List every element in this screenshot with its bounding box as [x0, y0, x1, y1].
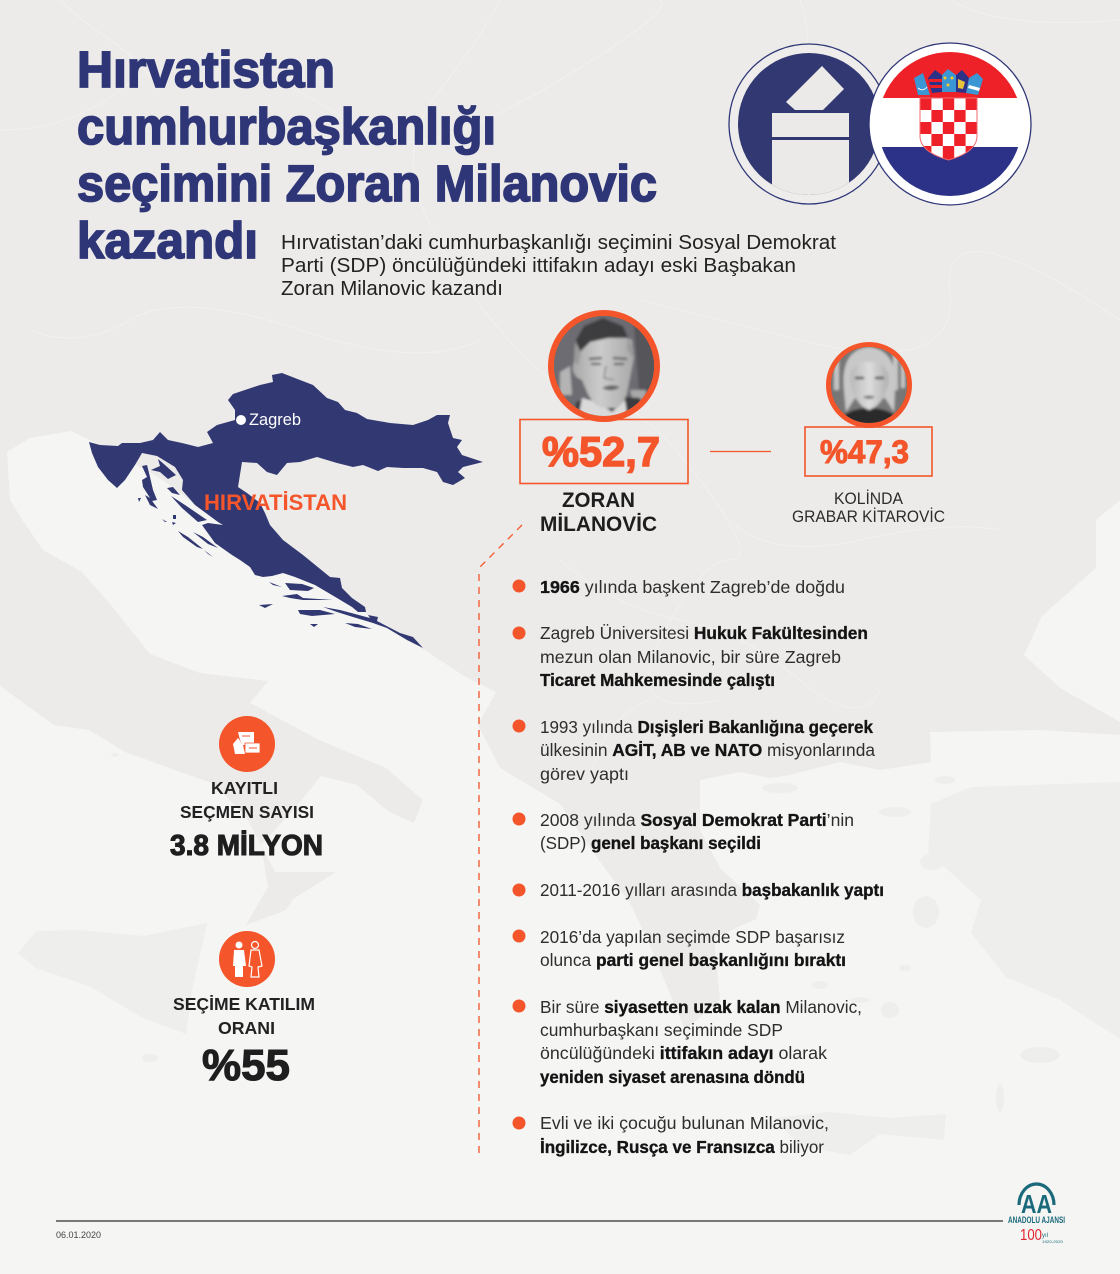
logo: Anadolu Ajansı: 100	[1020, 1227, 1042, 1244]
label: Hırvatistan: HIRVATİSTAN	[204, 490, 347, 515]
title: kazandı	[77, 212, 258, 269]
biography list	[512, 577, 884, 1157]
photo: Kolinda Grabar Kitarovic	[828, 344, 910, 426]
subtitle: Parti (SDP) öncülüğündeki ittifakın adayı eski Başbakan	[281, 255, 796, 277]
bullet 4: 2008 yılında Sosyal Demokrat Parti’nin	[540, 810, 854, 830]
subtitle	[281, 232, 836, 300]
stat: turnout	[173, 994, 315, 1090]
result: Milanovic: %52,7	[542, 428, 660, 475]
name: Kolinda Grabar Kitarovic: KOLİNDA	[834, 489, 904, 508]
bullet 7: öncülüğündeki ittifakın adayı olarak	[540, 1043, 827, 1063]
footer rule	[56, 1220, 1003, 1222]
title: Hırvatistan	[77, 41, 335, 98]
Turkey	[928, 782, 1120, 1039]
name: Zoran Milanovic: MİLANOVİC	[540, 513, 657, 536]
bullet 7: cumhurbaşkanı seçiminde SDP	[540, 1020, 783, 1040]
title: cumhurbaşkanlığı	[77, 98, 496, 155]
bullet 8	[512, 1113, 829, 1157]
stat: registered voters	[170, 778, 323, 862]
stat: registered voters: SEÇMEN SAYISI	[180, 802, 314, 822]
border lines	[0, 0, 1120, 780]
bullet 3: 1993 yılında Dışişleri Bakanlığına geçerek	[540, 717, 873, 737]
bullet 5: 2011-2016 yılları arasında başbakanlık yaptı	[540, 880, 884, 900]
date: 06.01.2020	[56, 1230, 101, 1240]
name: Kolinda Grabar Kitarovic	[792, 489, 945, 526]
bullet 4	[512, 810, 854, 853]
title	[77, 41, 657, 269]
logo: Anadolu Ajansı: yıl	[1042, 1233, 1048, 1239]
bullet 3: ülkesinin AGİT, AB ve NATO misyonlarında	[540, 740, 875, 760]
bullet 6	[512, 927, 846, 970]
islands	[138, 459, 423, 648]
bullet 2: mezun olan Milanovic, bir süre Zagreb	[540, 647, 841, 667]
bullet 8: Evli ve iki çocuğu bulunan Milanovic,	[540, 1113, 829, 1133]
bullet 6: olunca parti genel başkanlığını bıraktı	[540, 950, 846, 970]
Crete	[774, 1112, 946, 1155]
logo: Anadolu Ajansı: ANADOLU AJANSI	[1008, 1215, 1065, 1225]
name: Kolinda Grabar Kitarovic: GRABAR KİTAROVİC	[792, 507, 945, 526]
stat: turnout: ORANI	[218, 1018, 275, 1038]
bullet 7: yeniden siyaset arenasına döndü	[540, 1067, 805, 1087]
label: Zagreb: Zagreb	[249, 410, 301, 429]
bullet 3: görev yaptı	[540, 764, 629, 784]
map: Croatia	[89, 373, 483, 648]
Aegean islands	[111, 753, 1060, 1112]
icon: Croatian flag	[869, 43, 1031, 205]
result: Grabar Kitarovic	[805, 427, 932, 476]
bullet 2	[512, 623, 868, 690]
Sicily	[18, 923, 207, 1034]
bullet 6: 2016’da yapılan seçimde SDP başarısız	[540, 927, 845, 947]
name: Zoran Milanovic: ZORAN	[562, 489, 635, 512]
title: seçimini Zoran Milanovic	[77, 155, 657, 212]
bullet 8: İngilizce, Rusça ve Fransızca biliyor	[540, 1137, 824, 1157]
bullet 2: Ticaret Mahkemesinde çalıştı	[540, 670, 775, 690]
logo: Anadolu Ajansı: 1920-2020	[1042, 1239, 1064, 1244]
result: Milanovic	[520, 420, 688, 484]
subtitle: Zoran Milanovic kazandı	[281, 278, 503, 300]
bullet 7	[512, 997, 862, 1087]
icon: voters	[219, 931, 275, 987]
icon: ballot papers	[219, 716, 275, 772]
connector line	[710, 450, 771, 452]
bullet 1: 1966 yılında başkent Zagreb’de doğdu	[540, 577, 845, 597]
icon: ballot box	[729, 44, 889, 204]
dashed connector	[479, 525, 522, 1158]
bullet 4: (SDP) genel başkanı seçildi	[540, 833, 761, 853]
bullet 2: Zagreb Üniversitesi Hukuk Fakültesinden	[540, 623, 868, 643]
name: Zoran Milanovic	[540, 489, 657, 536]
coat of arms	[914, 69, 983, 160]
bullet 7: Bir süre siyasetten uzak kalan Milanovic,	[540, 997, 862, 1017]
stat: turnout: SEÇİME KATILIM	[173, 994, 315, 1014]
stat: registered voters: 3.8 MİLYON	[170, 830, 323, 862]
stat: registered voters: KAYITLI	[211, 778, 278, 798]
subtitle: Hırvatistan’daki cumhurbaşkanlığı seçimini Sosyal Demokrat	[281, 232, 836, 254]
logo: Anadolu Ajansı: AA	[1021, 1189, 1052, 1219]
photo: Zoran Milanovic	[550, 312, 660, 422]
logo: Anadolu Ajansı	[1008, 1184, 1065, 1244]
result: Grabar Kitarovic: %47,3	[820, 434, 909, 470]
stat: turnout: %55	[202, 1041, 290, 1090]
bullet 3	[512, 717, 875, 784]
